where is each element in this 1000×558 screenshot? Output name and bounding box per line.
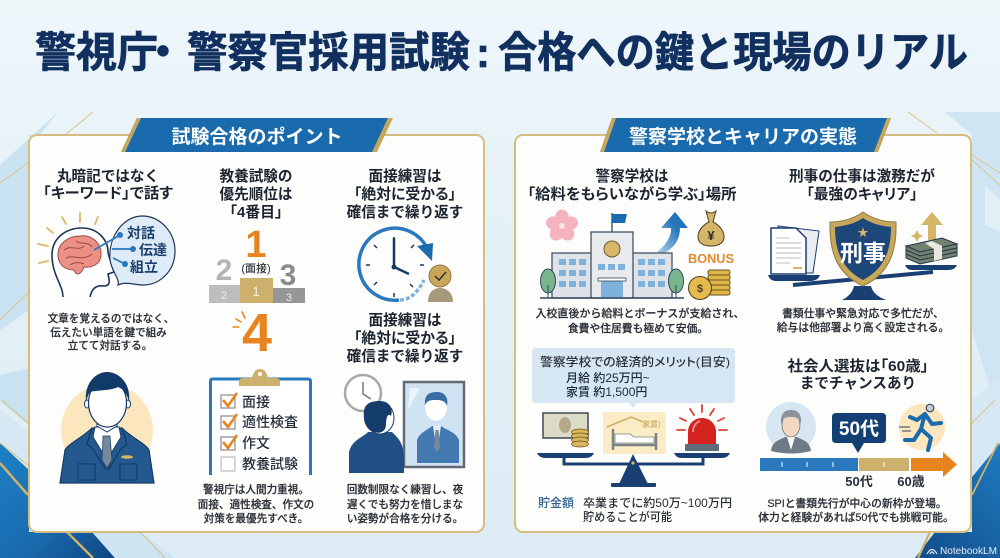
- text: mid-career explanation: 体力と経験があれば50代でも挑戦可能。: [758, 510, 954, 524]
- icon: balance of money rent and siren: [537, 405, 730, 487]
- heading: mid-career selection: までチャンスあり: [800, 375, 916, 392]
- heading: interview practice: 「絶対に受かる」: [354, 185, 456, 203]
- panel header: exam points: [121, 118, 393, 152]
- text: school benefits: 入校直後から給料とボーナスが支給され、: [535, 306, 745, 320]
- footer: NotebookLM badge: NotebookLM: [940, 545, 997, 557]
- callout: fifties: [832, 413, 886, 453]
- heading: mid-career selection: [788, 357, 928, 392]
- heading: keywords: [43, 168, 173, 202]
- heading: police school: 「給料をもらいながら学ぶ」場所: [528, 185, 737, 203]
- text: savings: 貯めることが可能: [583, 509, 672, 524]
- heading: mid-career selection: 社会人選抜は「60歳」: [788, 357, 928, 375]
- panel: school and career: [515, 118, 971, 532]
- text: school benefits: 食費や住居費も極めて安価。: [568, 321, 708, 335]
- heading: interview practice: 面接練習は: [369, 167, 442, 185]
- title: :: [476, 29, 490, 76]
- icon: shield on scale: ★: [858, 227, 868, 239]
- heading: keywords: 「キーワード」で話す: [43, 185, 173, 202]
- callout: economic merit: 警察学校での経済的メリット(目安): [540, 355, 730, 369]
- icon: clipboard checklist: 適性検査: [242, 414, 298, 430]
- title: 警察官採用試験: [187, 29, 470, 76]
- icon: shield on scale: 刑事: [840, 240, 886, 266]
- title: 警視庁: [35, 29, 158, 76]
- icon: balance of money rent and siren: 家賃): [642, 419, 661, 429]
- icon: brain with speech bubble: 対話: [127, 225, 155, 241]
- text: practice explanation: [347, 483, 464, 525]
- chart: age timeline: 50代: [845, 474, 873, 489]
- icon: clipboard checklist: 作文: [242, 435, 270, 451]
- text: practice explanation: 遅くでも努力を惜しまな: [347, 498, 463, 511]
- title: 合格への鍵と現場のリアル: [498, 29, 968, 76]
- text: savings: 卒業までに約50万~100万円: [583, 495, 732, 510]
- panel header: school and career: [600, 118, 891, 152]
- icon: school with bonus: ¥: [707, 228, 715, 243]
- text: priority explanation: 面接、適性検査、作文の: [198, 498, 314, 511]
- chart: podium: [209, 224, 305, 304]
- heading: interview practice: 確信まで繰り返す: [347, 204, 463, 221]
- icon: shield on scale: [768, 212, 957, 300]
- icon: clipboard checklist: 面接: [242, 394, 270, 410]
- icon: brain with speech bubble: 伝達: [139, 242, 167, 258]
- text: practice explanation: い姿勢が合格を分ける。: [347, 512, 463, 525]
- heading: detective work: 「最強のキャリア」: [806, 186, 918, 203]
- chart: podium: 2: [221, 290, 227, 302]
- icon: clipboard checklist: 教養試験: [242, 456, 298, 472]
- text: priority explanation: 警視庁は人間力重視。: [203, 483, 309, 496]
- text: savings: [538, 495, 732, 524]
- chart: podium: 2: [216, 254, 232, 287]
- text: mid-career explanation: [758, 496, 954, 524]
- panel header: school and career: 警察学校とキャリアの実態: [629, 125, 857, 148]
- text: detective explanation: 書類仕事や緊急対応で多忙だが、: [782, 306, 944, 320]
- heading: interview practice repeated: 面接練習は: [369, 311, 442, 329]
- callout: economic merit: 家賃 約1,500円: [566, 384, 647, 399]
- icon: person at mirror: [345, 375, 464, 473]
- heading: police school: 警察学校は: [596, 167, 669, 185]
- heading: general exam priority: 教養試験の: [220, 168, 292, 185]
- heading: general exam priority: [220, 168, 293, 221]
- chart: podium: (面接): [241, 261, 271, 275]
- panel header: exam points: 試験合格のポイント: [171, 125, 343, 148]
- icon: brain with speech bubble: [38, 213, 175, 297]
- heading: interview practice repeated: 「絶対に受かる」: [354, 329, 456, 347]
- text: priority explanation: [198, 483, 314, 525]
- callout: fifties: 50代: [839, 419, 879, 440]
- heading: interview practice repeated: [347, 311, 463, 365]
- chart: podium: 3: [286, 292, 292, 304]
- chart: podium: 1: [252, 284, 260, 299]
- icon: runner: [899, 404, 945, 450]
- icon: clipboard checklist: [210, 369, 310, 475]
- callout: economic merit: [532, 348, 735, 408]
- heading: police school: [528, 167, 737, 203]
- title: [35, 29, 968, 76]
- text: keywords explanation: 伝えたい単語を鍵で組み: [50, 326, 167, 339]
- icon: older businessman: [766, 402, 816, 454]
- heading: general exam priority: 優先順位は: [220, 186, 293, 203]
- text: detective explanation: [777, 306, 949, 334]
- icon: large number four: 4: [242, 303, 272, 363]
- heading: interview practice: [347, 167, 463, 221]
- panel: exam points: [29, 118, 484, 532]
- heading: keywords: 丸暗記ではなく: [57, 168, 159, 185]
- heading: general exam priority: 「4番目」: [230, 204, 282, 221]
- heading: detective work: 刑事の仕事は激務だが: [789, 167, 935, 185]
- chart: podium: 1: [245, 224, 267, 266]
- icon: clock and person: [359, 228, 453, 302]
- icon: school with bonus: $: [697, 283, 703, 295]
- chart: age timeline: [760, 452, 957, 489]
- icon: school with bonus: BONUS: [688, 251, 734, 266]
- icon: uniformed officer: [60, 372, 154, 483]
- text: savings: 貯金額: [538, 495, 574, 510]
- icon: school with bonus: [540, 210, 734, 300]
- text: detective explanation: 給与は他部署より高く設定される。: [777, 320, 949, 334]
- heading: detective work: [789, 167, 935, 203]
- chart: podium: 3: [280, 259, 296, 292]
- text: keywords explanation: [48, 312, 174, 352]
- text: mid-career explanation: SPIと書類先行が中心の新枠が登場。: [767, 496, 947, 510]
- text: school benefits: [535, 306, 745, 335]
- heading: interview practice repeated: 確信まで繰り返す: [347, 348, 463, 365]
- callout: economic merit: 月給 約25万円~: [566, 370, 650, 385]
- text: priority explanation: 対策を最優先すべき。: [204, 512, 308, 525]
- text: keywords explanation: 文章を覚えるのではなく、: [48, 312, 174, 325]
- icon: brain with speech bubble: 組立: [130, 259, 158, 275]
- chart: age timeline: 60歳: [897, 474, 925, 489]
- text: keywords explanation: 立てて対話する。: [68, 339, 152, 352]
- text: practice explanation: 回数制限なく練習し、夜: [347, 483, 464, 496]
- title: ・: [142, 29, 184, 76]
